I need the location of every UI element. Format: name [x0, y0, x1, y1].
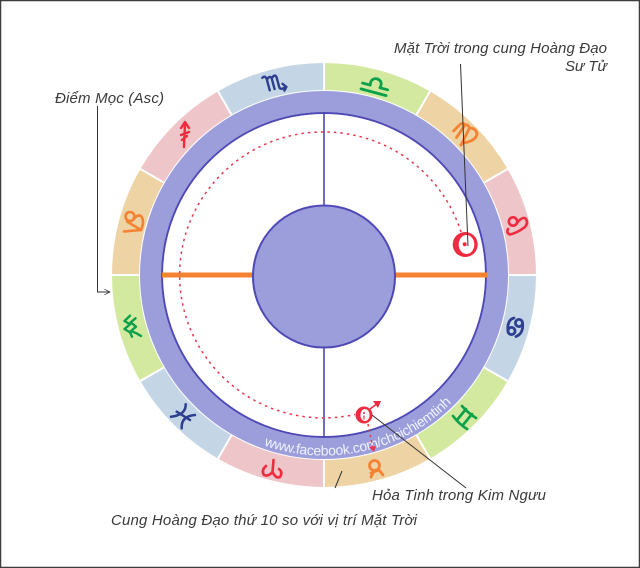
sign: Virgo: [423, 103, 496, 176]
icon: Sun: [453, 232, 478, 257]
inner chart disc: [162, 113, 486, 437]
label: Sun in Leo: Mặt Trời trong cung Hoàng Đạo: [394, 40, 607, 57]
icon: Mars: [356, 401, 381, 424]
sign: Aries: [225, 447, 324, 477]
label: Ascendant: Điểm Mọc (Asc): [55, 90, 164, 107]
website text on ring: www.facebook.com/choichiemtinh: [266, 398, 451, 456]
sign: Scorpio: [225, 72, 324, 103]
vertical axis: [323, 113, 325, 437]
label: Sun in Leo: Sư Tử: [565, 58, 608, 75]
sign: Cancer: [496, 275, 523, 374]
lavender ring: [150, 102, 498, 448]
arrow: Ascendant: [98, 106, 110, 292]
centre circle: [253, 206, 395, 348]
label: tenth house: Cung Hoàng Đạo thứ 10 so với vị trí Mặt Trời: [111, 512, 418, 529]
sign: Gemini: [423, 374, 496, 447]
sign: Sagittarius: [152, 103, 225, 176]
leader: Sun: [460, 64, 468, 246]
dotted orbit: [180, 132, 461, 418]
sign: Capricorn: [124, 176, 152, 275]
sign: Taurus: [324, 447, 423, 477]
sign: Pisces: [152, 374, 225, 447]
sign: Leo: [496, 176, 527, 275]
sign: Aquarius: [124, 275, 152, 374]
arrow: Mars to Taurus: [368, 424, 376, 452]
label: Sun in Leo: [394, 40, 608, 75]
sign: Libra: [324, 75, 423, 103]
label: Mars in Taurus: Hỏa Tinh trong Kim Ngưu: [372, 487, 547, 504]
leader: tenth house: [335, 471, 342, 488]
leader: Mars: [372, 415, 466, 488]
horizontal axis: orange bars: [162, 272, 487, 278]
